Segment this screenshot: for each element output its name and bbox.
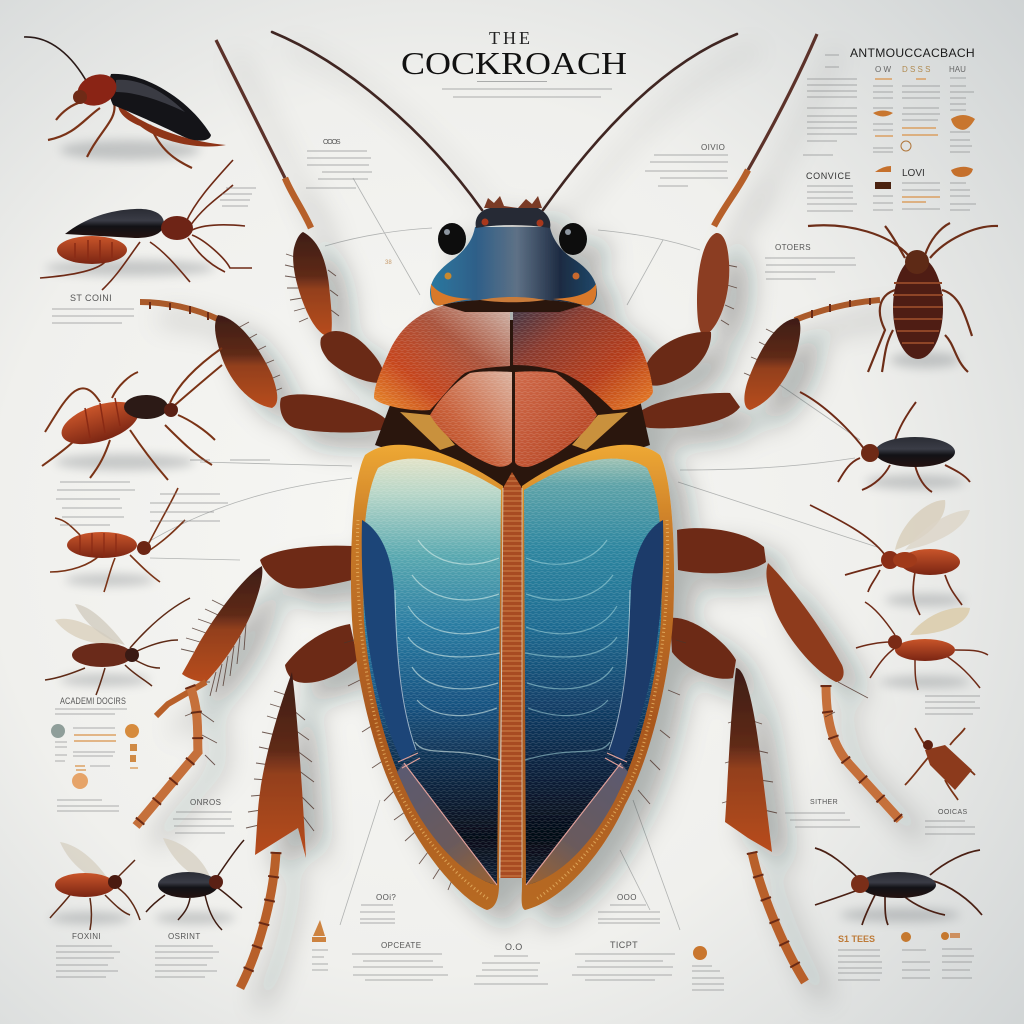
text: SITREE: S1 TEES [838,934,875,944]
head [430,196,597,312]
text: top left callout: OOOS [323,139,341,146]
text: centre OO: O.O [505,942,523,952]
title [401,28,627,97]
text: top left callout [306,139,372,188]
right wing [522,445,674,910]
panel: left small chart [51,696,139,811]
front right leg [644,34,817,386]
chart circles [51,724,65,738]
text: right EITINER: SITHER [810,799,838,806]
text: right callout [765,243,856,279]
title subtitle lines [442,82,612,97]
left wing [351,445,503,910]
text: centre OO [474,942,548,984]
icon: orange dot with caption [692,946,724,990]
text column left [803,55,857,155]
left wing ribs [408,540,500,760]
text: right centre callouts: TICPT [610,940,638,950]
eyes [438,223,466,255]
middle left leg [140,302,390,432]
insect: dark bottom right [815,848,982,925]
text: callouts left middle [56,482,228,525]
title: COCKROACH [401,45,627,81]
right wing membrane [524,459,662,885]
panel: anatomical chart top right [803,46,976,211]
tiny label near head: 38 [385,260,392,266]
insect: winged bottom left [50,842,140,930]
right wing ribs [525,540,617,760]
wing hairs [344,640,686,890]
front left leg [216,40,384,383]
text: top right callout: OIVIO [701,143,725,152]
panel heading: ACADEMI DOCIRS [60,696,126,706]
insect: small red left [50,488,185,592]
antennae [272,32,737,210]
text: right EITINER: OOICAS [938,809,968,816]
title: THE [489,28,533,48]
section heading: CONVICE [806,171,851,181]
thorax underside [375,320,650,492]
text: ONROS: ONROS [190,798,221,807]
text: bottom column 2: OSRINT [168,932,201,941]
pronotum lobes [374,302,653,467]
text: small icon columns [901,932,974,978]
panel: anatomical chart top right: LOVI [902,168,925,179]
text: left callout ST COINI: ST COINI [70,293,112,303]
right wing feathered tip [526,763,628,885]
leader lines [148,178,880,930]
column headings: O W [875,65,891,74]
text: left callout ST COINI [52,293,134,323]
lower text [807,183,976,211]
text column middle [873,78,974,152]
text: bottom centre callouts: OOi? [376,893,396,902]
left wing feathered tip [397,763,497,885]
insect: winged dark bottom [146,838,244,930]
right wing edge [522,445,674,910]
centre strip [500,472,522,878]
insect: black beetle top left [24,37,226,168]
insect: small winged right [856,602,988,690]
left wing side panel [362,520,416,762]
rear right lower leg [670,618,805,982]
text: right EITINER [785,696,980,834]
text: bottom centre callouts [352,893,448,980]
main cockroach [136,32,900,988]
text: bottom column 2 [155,932,219,977]
middle right leg [635,298,880,428]
insect: winged left [45,598,190,695]
rear left lower leg [240,624,358,988]
right wing side panel [609,520,663,762]
panel: anatomical chart top right: D S S S [902,65,930,74]
insect: dark right [800,392,970,492]
head crown [476,208,550,228]
insect: red body left [42,348,222,480]
text: left bottom columns [56,932,120,977]
panel heading: ANTMOUCCACBACH [850,46,975,60]
text: right callout: OTOERS [775,243,811,252]
text: ONROS [173,798,234,833]
text: bottom centre callouts: OPCEATE [381,941,421,950]
insect: small brown right [905,728,975,800]
left wing membrane [363,459,501,885]
insect: winged red right [810,500,970,615]
rear right upper leg [677,528,900,820]
rear left upper leg [136,546,352,826]
orange icons [873,110,975,130]
left wing edge [351,445,503,910]
text: left bottom columns: FOXINI [72,932,101,941]
head orange corners [431,284,596,306]
panel: anatomical chart top right: HAU [949,65,966,74]
insect: top view right [808,223,998,372]
icon: bottom orange figure [312,920,328,970]
text: right centre callouts [572,893,675,980]
text: right centre callouts: OOO [617,893,637,902]
text: callouts upper left [190,188,270,460]
text: top right callout [645,143,728,186]
ground shadows [45,140,970,924]
text: SITREE [838,934,882,980]
insect: black and red left [40,160,252,290]
